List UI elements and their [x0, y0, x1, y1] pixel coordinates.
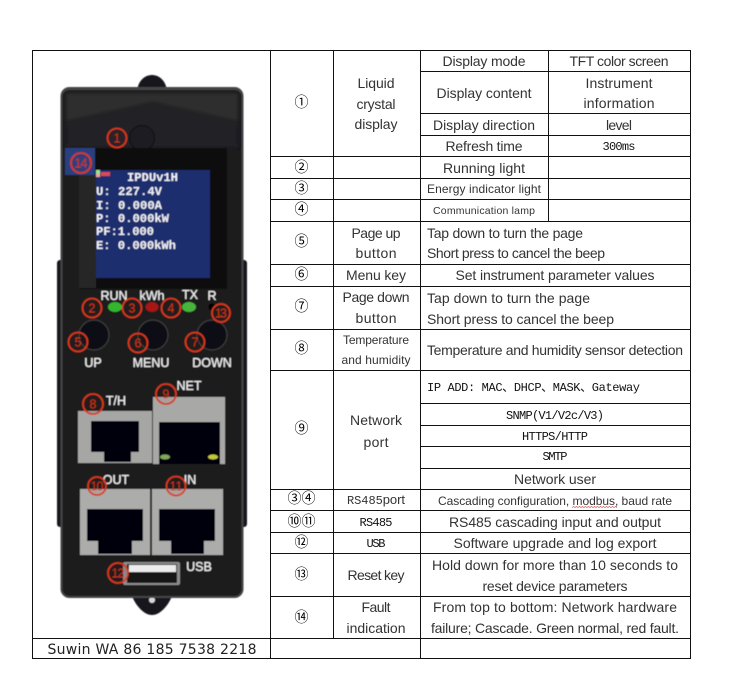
mounting lugs and side tabs: [57, 75, 247, 615]
red circled callout numbers: 11: [170, 480, 183, 494]
LCD screen: PF:1.000: [96, 225, 154, 239]
LCD screen: U: 227.4V: [96, 185, 163, 199]
red circled callout numbers: 2: [89, 302, 96, 316]
table: item numbers: ⑩⑪: [288, 511, 316, 531]
buttons: [79, 320, 227, 350]
table: function descriptions: Tap down to turn the page: [427, 225, 583, 241]
display bezel: [79, 148, 227, 289]
red circled callout numbers: 5: [75, 336, 82, 350]
table: item numbers: ②: [294, 157, 308, 177]
table: liquid crystal display specs: TFT color screen: [570, 53, 668, 69]
table: function descriptions: Network user: [514, 471, 596, 487]
table: item names: Liquid: [358, 75, 394, 91]
table: function descriptions: Short press to cancel the beep: [427, 245, 605, 261]
red circled callout numbers: 9: [163, 388, 170, 402]
table: liquid crystal display specs: Refresh time: [446, 138, 523, 154]
table: item numbers: ⑫: [294, 532, 308, 552]
spell-check underline under modbus: [572, 506, 617, 508]
sensor window: [130, 126, 154, 150]
table: function descriptions: RS485 cascading input and output: [449, 514, 661, 530]
red circled callout numbers: 6: [135, 336, 142, 350]
table: function descriptions: failure; Cascade. Green normal, red fault.: [431, 620, 679, 636]
table: item names: display: [354, 116, 398, 132]
table: liquid crystal display specs: Display direction: [433, 117, 535, 133]
LCD screen: [96, 170, 210, 278]
table: item names: Page down: [342, 289, 410, 305]
device photo: power distribution meter: [57, 75, 247, 615]
table: function descriptions: HTTPS/HTTP: [522, 430, 588, 444]
table: liquid crystal display specs: level: [606, 117, 632, 133]
table: light descriptions: Communication lamp: [433, 205, 535, 217]
panel labels: OUT: [103, 473, 130, 487]
table: liquid crystal display specs: 300ms: [602, 140, 636, 154]
table: item numbers: ⑭: [294, 607, 308, 627]
table: liquid crystal display specs: information: [584, 95, 654, 111]
red circled callout numbers: 12: [112, 566, 125, 580]
panel labels: R: [207, 289, 217, 303]
table: function descriptions: Cascading configuration, modbus, baud rate: [438, 494, 672, 508]
panel labels: DOWN: [192, 356, 232, 370]
panel labels: kWh: [140, 289, 165, 303]
table: item names: and humidity: [342, 353, 410, 367]
table: function descriptions: Set instrument parameter values: [456, 267, 654, 283]
table: item names: [342, 75, 410, 636]
table: item names: RS485: [360, 516, 392, 530]
USB port: [123, 562, 180, 585]
table: item numbers: ⑥: [294, 264, 308, 284]
table: function descriptions: Tap down to turn the page: [427, 290, 590, 306]
table: item numbers: ③: [294, 178, 308, 198]
LCD screen: E: 0.000kWh: [96, 239, 176, 253]
table: function descriptions: Software upgrade and log export: [454, 535, 657, 551]
table: item names: Menu key: [346, 267, 406, 283]
red circled callout numbers: 8: [90, 398, 97, 412]
table: function descriptions: IP ADD: MAC、DHCP、MASK、Gateway: [427, 381, 640, 395]
panel labels: NET: [176, 379, 202, 393]
table: item numbers: [288, 92, 316, 627]
footer contact text: Suwin WA 86 185 7538 2218: [48, 642, 256, 658]
LCD screen: IPDUv1H: [127, 171, 178, 185]
panel labels: UP: [84, 356, 102, 370]
LCD screen: I: 0.000A: [96, 199, 163, 213]
table: item names: RS485port: [347, 492, 405, 508]
table grid: [32, 50, 691, 659]
panel labels: T/H: [106, 394, 126, 408]
table: liquid crystal display specs: Display content: [436, 85, 532, 101]
red circled callout numbers: 4: [168, 302, 175, 316]
table: function descriptions: Temperature and humidity sensor detection: [427, 342, 683, 358]
IN port: [152, 489, 223, 555]
table: function descriptions: Hold down for more than 10 seconds to: [432, 557, 678, 573]
table: light descriptions: Energy indicator light: [427, 182, 542, 196]
red circled callout numbers: 13: [215, 306, 227, 320]
table: function descriptions: From top to bottom: Network hardware: [433, 599, 677, 615]
table: item numbers: ③④: [288, 488, 316, 508]
LCD screen: P: 0.000kW: [96, 212, 170, 226]
table: item names: Network: [350, 412, 403, 428]
red circled callout numbers: 1: [114, 132, 121, 146]
red circled callout numbers: 7: [192, 336, 199, 350]
panel labels: TX: [182, 288, 199, 302]
table: item names: port: [364, 434, 389, 450]
table: item names: indication: [346, 620, 406, 636]
table: item names: button: [356, 310, 396, 326]
panel labels: [84, 288, 232, 574]
panel labels: USB: [186, 560, 212, 574]
panel labels: RUN: [100, 289, 128, 303]
table: light descriptions: [427, 160, 542, 217]
table: item names: Temperature: [343, 333, 409, 347]
table: item numbers: ⑤: [294, 231, 308, 251]
device body: [60, 87, 244, 598]
table: item names: button: [356, 245, 396, 261]
table: item numbers: ⑬: [294, 564, 308, 584]
table: item numbers: ⑦: [294, 296, 308, 316]
red circled callout numbers: 14: [74, 156, 88, 170]
table: liquid crystal display specs: [433, 53, 668, 154]
table: item names: Fault: [362, 599, 391, 615]
table: item names: USB: [366, 537, 386, 551]
table: function descriptions: Short press to cancel the beep: [427, 311, 614, 327]
table: item numbers: ⑨: [294, 418, 308, 438]
table: function descriptions: reset device parameters: [482, 578, 628, 594]
table: liquid crystal display specs: Instrument: [586, 75, 653, 91]
table: item names: Page up: [352, 225, 401, 241]
table: item numbers: ④: [294, 199, 308, 219]
red circled callout numbers: 3: [129, 302, 136, 316]
table: liquid crystal display specs: Display mode: [442, 53, 526, 69]
table: item numbers: ①: [294, 92, 308, 112]
table: function descriptions: [427, 225, 683, 636]
indicator LEDs: [108, 302, 216, 312]
fault indication blue square: [65, 148, 95, 175]
T/H port: [78, 411, 152, 463]
table: item names: crystal: [356, 96, 396, 112]
table: item numbers: ⑧: [294, 338, 308, 358]
panel labels: MENU: [133, 356, 169, 370]
OUT port: [80, 489, 150, 555]
red circled callout numbers: [68, 128, 230, 583]
panel labels: IN: [184, 473, 196, 487]
table: function descriptions: SNMP(V1/V2c/V3): [506, 409, 604, 423]
table: function descriptions: SMTP: [542, 450, 568, 464]
table: light descriptions: Running light: [443, 160, 525, 176]
NET port: [153, 397, 225, 464]
table: item names: Reset key: [348, 567, 404, 583]
red circled callout numbers: 10: [90, 480, 104, 494]
